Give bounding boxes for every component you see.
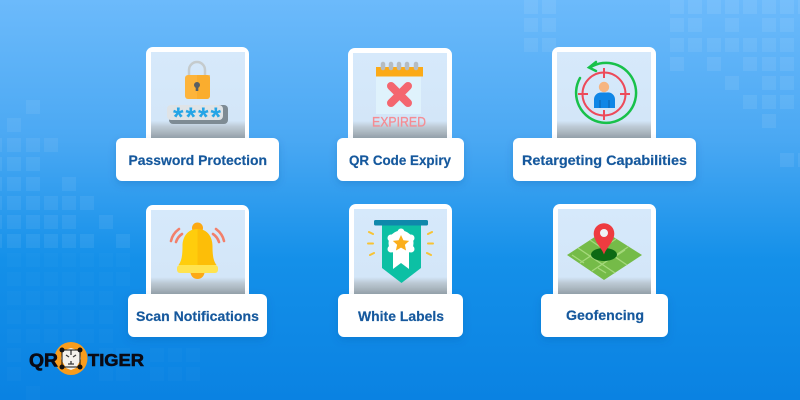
label <box>513 138 696 181</box>
card: White Labels <box>338 204 463 337</box>
label: White Labels <box>358 308 444 324</box>
icon: padlock and password field <box>167 62 228 132</box>
icon: retargeting crosshair <box>576 62 636 123</box>
label <box>116 138 279 181</box>
label: Scan Notifications <box>136 308 259 324</box>
label: Geofencing <box>566 307 644 323</box>
logo: QR TIGER: TIGER <box>88 350 144 370</box>
icon: ringing bell <box>171 222 224 279</box>
card: Password Protection <box>116 47 279 181</box>
icon: map with location pin <box>567 223 642 280</box>
icon: award banner <box>368 220 433 283</box>
label: Retargeting Capabilities <box>522 152 687 168</box>
icon: padlock and password field: **** <box>173 102 221 132</box>
card: Scan Notifications <box>128 205 267 337</box>
card: Geofencing <box>541 204 668 337</box>
logo: QR TIGER: QR <box>29 350 58 370</box>
card: Retargeting Capabilities <box>513 47 696 181</box>
icon: tiger face <box>60 348 82 370</box>
logo: QR TIGER <box>29 342 144 375</box>
icon: expired calendar: EXPIRED <box>372 114 426 130</box>
label: QR Code Expiry <box>349 152 451 168</box>
label: Password Protection <box>128 152 267 168</box>
card: QR Code Expiry <box>337 48 464 181</box>
